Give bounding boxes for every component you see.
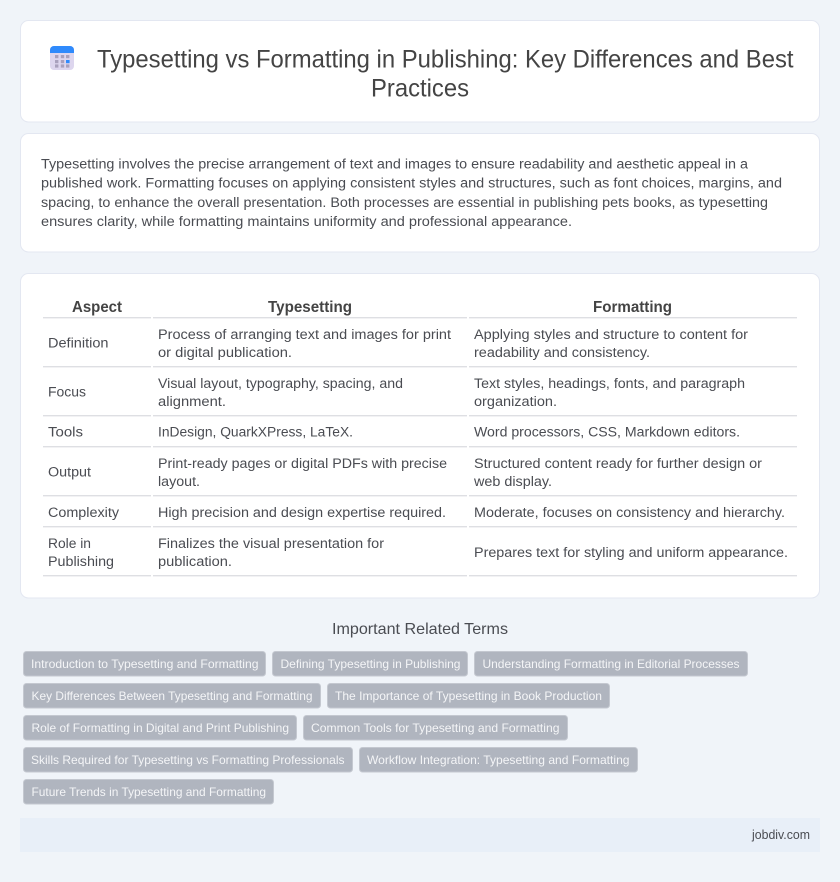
table row: Output: Output	[48, 465, 91, 481]
chip: Defining Typesetting in Publishing	[280, 657, 460, 671]
chip	[304, 716, 568, 740]
panel: introduction	[20, 134, 820, 252]
chip: Common Tools for Typesetting and Formatting	[311, 721, 560, 735]
chip	[272, 652, 468, 676]
table row: Role in Publishing: Publishing	[48, 554, 114, 570]
table row: Tools: InDesign, QuarkXPress, LaTeX.	[158, 425, 353, 441]
table row: Focus: Visual layout, typography, spacing, and	[158, 376, 403, 392]
chip	[328, 684, 610, 708]
table row: Role in Publishing	[48, 536, 788, 570]
table row: Role in Publishing: Finalizes the visual presentation for	[158, 536, 384, 552]
table header row	[72, 299, 672, 316]
title: Practices	[371, 74, 469, 102]
table row: Tools: Word processors, CSS, Markdown editors.	[474, 425, 740, 441]
text block: introduction paragraph: published work. Formatting focuses on applying consistent styles and structures, such as font choices, margins, and	[41, 176, 782, 192]
table header row: Typesetting	[268, 299, 352, 316]
table row: Focus	[48, 376, 745, 410]
title	[97, 46, 794, 102]
heading: important related terms: Important Related Terms	[332, 621, 508, 638]
table row: Definition: Definition	[48, 336, 108, 352]
table row: Focus: organization.	[474, 394, 557, 410]
chip: Future Trends in Typesetting and Formatting	[32, 785, 266, 799]
icon: calendar	[50, 46, 74, 70]
table row: Output: web display.	[473, 474, 552, 490]
table row: Focus: Focus	[48, 385, 86, 401]
table row: Focus: alignment.	[158, 394, 226, 410]
table row: Complexity	[48, 505, 785, 521]
table row: Focus: Text styles, headings, fonts, and paragraph	[474, 376, 745, 392]
chip	[24, 684, 320, 708]
chip: Skills Required for Typesetting vs Formatting Professionals	[31, 753, 344, 767]
text block: introduction paragraph: ensures clarity, while formatting maintains uniformity and professional appearance.	[41, 214, 572, 230]
chip	[360, 748, 638, 772]
table row: Output	[48, 456, 762, 490]
table row: Complexity: High precision and design expertise required.	[158, 505, 446, 521]
chip: Introduction to Typesetting and Formatting	[31, 657, 258, 671]
panel: related term chips	[24, 652, 748, 804]
table row: Definition: Process of arranging text and images for print	[158, 327, 451, 343]
table row: Definition: or digital publication.	[158, 345, 292, 361]
chip	[474, 652, 748, 676]
table row: Output: layout.	[158, 474, 200, 490]
table row: Complexity: Moderate, focuses on consistency and hierarchy.	[474, 505, 785, 521]
panel: comparison table	[20, 274, 820, 598]
table row: Role in Publishing: publication.	[158, 554, 232, 570]
table row: Role in Publishing: Prepares text for styling and uniform appearance.	[474, 545, 788, 561]
table header row: Aspect	[72, 299, 123, 316]
table row: Definition: Applying styles and structure to content for	[474, 327, 748, 343]
table row: Complexity: Complexity	[48, 505, 120, 521]
table row: Tools	[48, 425, 740, 441]
chip	[24, 780, 274, 804]
chip	[24, 748, 352, 772]
chip: Role of Formatting in Digital and Print Publishing	[32, 721, 289, 735]
text block: introduction paragraph	[41, 156, 782, 230]
table header row: Formatting	[593, 299, 672, 316]
title: Typesetting vs Formatting in Publishing: Key Differences and Best	[97, 46, 794, 74]
text block: introduction paragraph: spacing, to enhance the overall presentation. Both processes are essential in publishing pets books, as typesetting	[41, 195, 768, 211]
footer bar: jobdiv.com	[751, 828, 810, 842]
chip: The Importance of Typesetting in Book Production	[335, 689, 602, 703]
chip: Understanding Formatting in Editorial Processes	[482, 657, 740, 671]
table row: Tools: Tools	[48, 425, 83, 441]
chip	[24, 652, 266, 676]
chip: Key Differences Between Typesetting and Formatting	[32, 689, 312, 703]
footer bar	[20, 818, 820, 852]
table row: Output: Structured content ready for further design or	[474, 456, 762, 472]
table row: Role in Publishing: Role in	[48, 536, 91, 552]
panel: header	[20, 20, 820, 122]
chip	[24, 716, 296, 740]
table row: Definition: readability and consistency.	[474, 345, 650, 361]
text block: introduction paragraph: Typesetting involves the precise arrangement of text and images to ensure readability and aesthetic appeal in a	[41, 156, 748, 172]
table row: Output: Print-ready pages or digital PDFs with precise	[158, 456, 447, 472]
chip: Workflow Integration: Typesetting and Formatting	[367, 753, 630, 767]
table row: Definition	[48, 327, 748, 361]
